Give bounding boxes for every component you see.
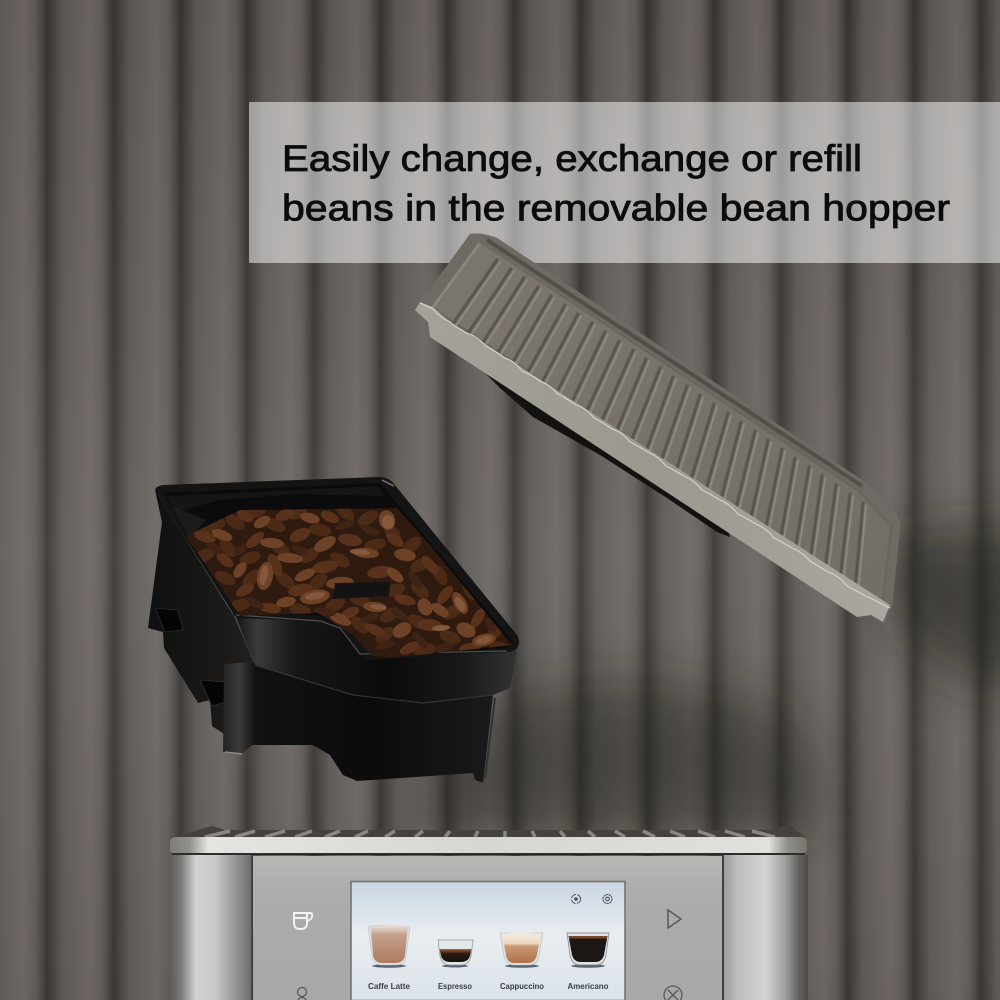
hopper top rim — [155, 477, 519, 660]
hopper cavity — [163, 483, 512, 656]
hopper lower body — [223, 662, 493, 783]
machine top band — [170, 837, 807, 854]
lid front lip — [415, 302, 890, 622]
lid floor — [433, 243, 890, 606]
hopper leg highlights — [485, 698, 495, 778]
icon: settings — [603, 894, 612, 904]
lid dark underside — [484, 372, 730, 537]
lid outer shell — [415, 234, 900, 622]
icon: beans selector — [298, 988, 306, 1000]
machine right metal column — [724, 855, 808, 1000]
heading — [282, 138, 950, 228]
icon: play — [668, 910, 681, 928]
machine top grille — [170, 825, 806, 838]
drink labels: Americano — [568, 982, 609, 991]
drink labels: Espresso — [438, 982, 472, 991]
heading: beans in the removable bean hopper — [282, 188, 950, 228]
machine control panel — [253, 856, 722, 1000]
icon: cancel — [664, 986, 682, 1000]
bean hopper container — [148, 477, 519, 783]
text panel — [249, 102, 1000, 263]
heading: Easily change, exchange or refill — [282, 138, 862, 179]
hopper rear clips and side silhouette — [148, 490, 256, 734]
icon: cup — [294, 913, 312, 929]
bean hopper lid — [415, 234, 900, 622]
drink labels: Caffe Latte — [368, 982, 411, 991]
drink labels — [368, 982, 609, 991]
lid back wall — [420, 234, 900, 607]
hopper rim band — [235, 615, 518, 703]
cup: cappuccino — [500, 932, 543, 968]
cup: caffe latte — [368, 926, 410, 968]
coffee beans — [186, 500, 512, 659]
cup: americano — [567, 933, 609, 968]
cup: espresso — [438, 940, 473, 968]
bean hopper tab — [333, 582, 390, 599]
lid ribs — [450, 260, 866, 592]
touch screen — [351, 882, 625, 1000]
drink labels: Cappuccino — [500, 982, 544, 991]
machine left metal column — [170, 855, 252, 1000]
coffee machine — [170, 825, 808, 1000]
icon: clean — [572, 894, 580, 904]
